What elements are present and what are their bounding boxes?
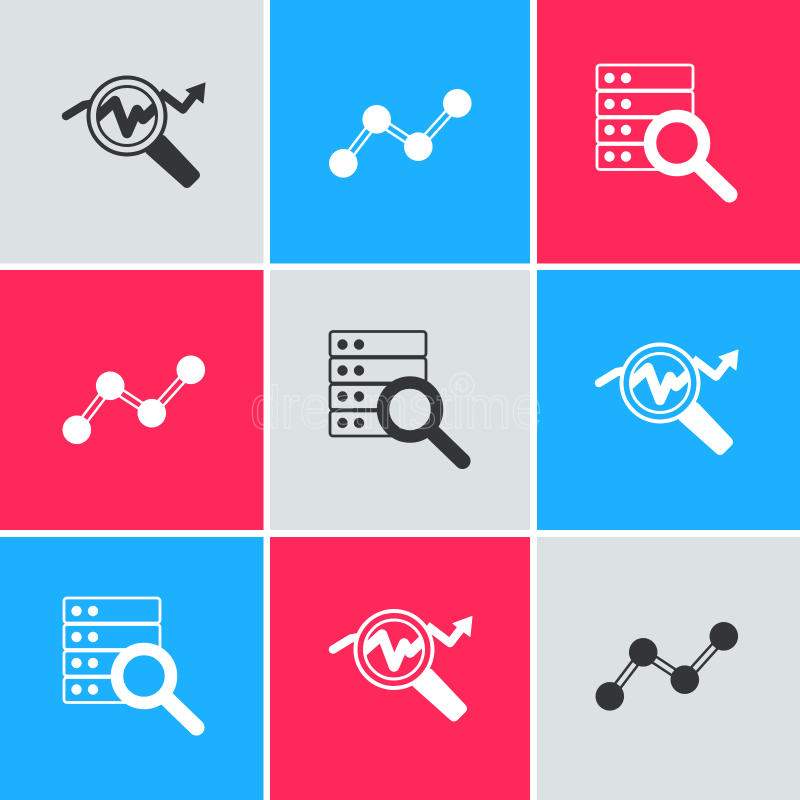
icon: connected-dots line chart, white xyxy=(62,356,205,444)
icon: magnifier over trend arrow, dark xyxy=(66,78,205,183)
icon: server stack with magnifier, white xyxy=(597,65,730,194)
panel: analysis magnifier on grey xyxy=(0,0,264,264)
icon: server stack with magnifier, white xyxy=(64,598,196,728)
icon: magnifier over trend arrow, white xyxy=(599,344,738,450)
watermark: dreamstime xyxy=(250,374,542,441)
icon: connected-dots line chart, dark xyxy=(596,622,738,711)
panel: analysis magnifier on red xyxy=(270,537,530,800)
panel: server search on blue xyxy=(0,537,264,800)
panel: server search on grey xyxy=(270,270,530,530)
panel: line chart on grey xyxy=(537,537,800,800)
panel: line chart on blue xyxy=(270,0,530,264)
panel: line chart on red xyxy=(0,270,264,530)
panel: analysis magnifier on blue xyxy=(537,270,800,530)
panel: server search on red xyxy=(537,0,800,264)
icon: server stack with magnifier, dark xyxy=(330,332,462,461)
icon: magnifier over trend arrow, white xyxy=(333,611,472,716)
icon: connected-dots line chart, white xyxy=(329,89,472,178)
